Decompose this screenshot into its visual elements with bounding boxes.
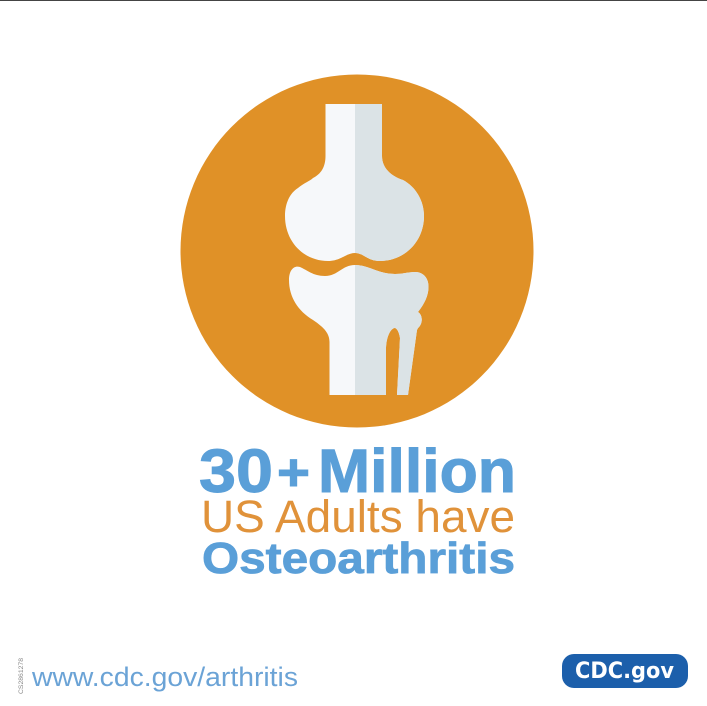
headline: 30+ Million: + [277,444,310,502]
orange circle background [180,74,534,428]
femur bone [285,104,424,261]
tibia and fibula bones [289,265,429,395]
CDC.gov badge: CDC.gov [575,659,675,684]
CDC.gov badge [562,654,688,688]
icon: orange circle with knee joint [180,74,534,428]
website url: www.cdc.gov/arthritis [31,662,298,692]
headline: 30+ Million: 30 [199,437,273,505]
headline: 30+ Million [199,437,516,505]
subheading: US Adults have: US Adults have [201,491,515,542]
headline: 30+ Million: Million [318,437,516,505]
heading: Osteoarthritis: Osteoarthritis [202,534,515,583]
publication code: CS2861278 [18,658,25,694]
